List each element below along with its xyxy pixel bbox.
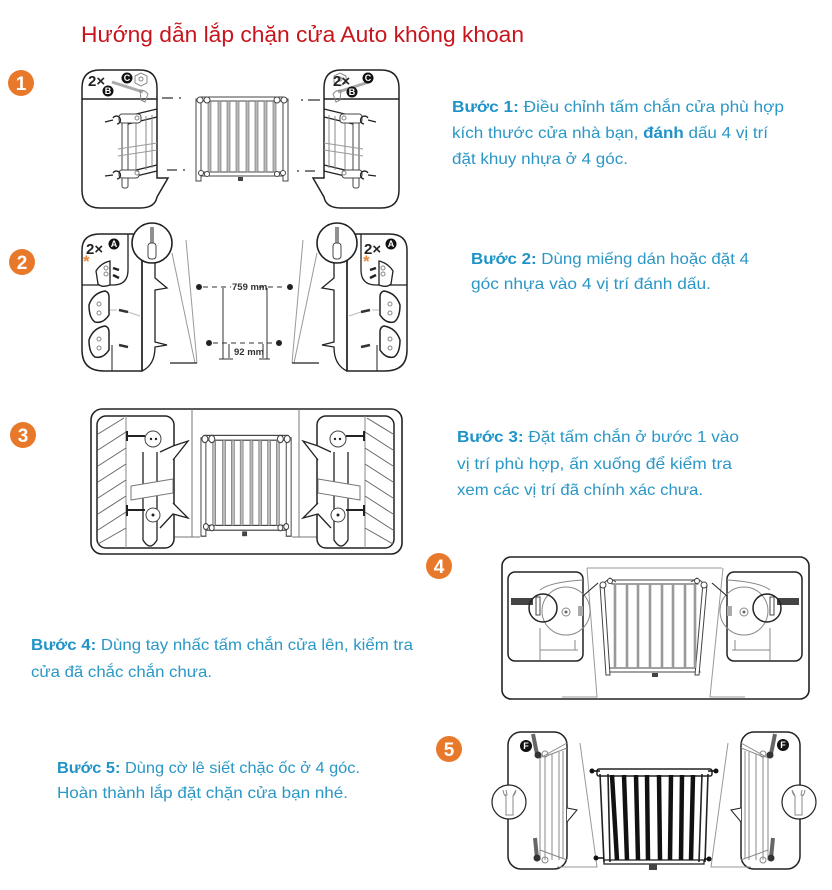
measurements [196, 282, 293, 359]
step 5 text: Bước 5: Dùng cờ lê siết chặc ốc ở 4 góc. [57, 760, 360, 777]
gate [196, 97, 288, 181]
panel: left detail: 2× [88, 73, 105, 90]
step 1 text [452, 97, 784, 168]
panel: right bracket detail: * [363, 252, 370, 271]
step 1 illustration [82, 70, 399, 208]
step 4 illustration [502, 557, 809, 699]
panel: right detail: C [365, 73, 372, 83]
step 3 illustration [91, 409, 402, 554]
step 3 badge [10, 422, 36, 448]
step 2 text [471, 251, 749, 293]
step 1 text: kích thước cửa nhà bạn, đánh dấu 4 vị trí [452, 125, 769, 142]
step 1 text: Bước 1: Điều chỉnh tấm chắn cửa phù hợp [452, 97, 784, 116]
panel: left detail: C [124, 73, 131, 83]
step 3 text: Bước 3: Đặt tấm chắn ở bước 1 vào [457, 427, 739, 446]
panel: left detail [492, 732, 597, 869]
step 5 badge: 5 [444, 740, 455, 761]
panel: left bracket detail: A [111, 239, 118, 249]
panel: right detail: B [349, 87, 356, 97]
step 2 badge: 2 [17, 253, 27, 274]
title: Hướng dẫn lắp chặn cửa Auto không khoan [81, 22, 524, 47]
panel: left detail [97, 416, 188, 548]
step 2 badge [9, 249, 35, 275]
panel: right detail [303, 416, 394, 548]
panel: right detail: F [780, 740, 786, 750]
panel: right bracket detail [292, 223, 407, 371]
step 5 text: Hoàn thành lắp đặt chặn cửa bạn nhé. [57, 783, 348, 802]
step 4 text [31, 635, 413, 681]
panel: right detail [712, 572, 802, 661]
step 4 text: cửa đã chắc chắn chưa. [31, 662, 212, 681]
panel: right detail [313, 70, 399, 208]
step 2 illustration [82, 223, 407, 371]
measurements: 759 mm [232, 282, 267, 293]
step 1 badge: 1 [16, 74, 27, 95]
panel: left detail [82, 70, 168, 208]
step 1 badge [8, 70, 34, 96]
panel: left bracket detail: * [83, 252, 90, 271]
panel: right detail [711, 732, 816, 869]
panel: left detail: B [105, 86, 112, 96]
step 4 text: Bước 4: Dùng tay nhấc tấm chắn cửa lên, kiểm tra [31, 635, 413, 654]
panel: left detail: F [523, 741, 529, 751]
panel: left bracket detail: 2× [86, 241, 103, 258]
step 4 badge [426, 553, 452, 579]
step 3 badge: 3 [18, 426, 28, 447]
step 5 text [57, 760, 360, 802]
measurements: 92 mm [234, 347, 264, 358]
step 1 text: đặt khuy nhựa ở 4 góc. [452, 151, 628, 168]
gate [201, 435, 291, 536]
panel: right bracket detail: 2× [364, 241, 381, 258]
step 2 text: góc nhựa vào 4 vị trí đánh dấu. [471, 276, 711, 293]
step 2 text: Bước 2: Dùng miếng dán hoặc đặt 4 [471, 251, 749, 268]
step 4 badge: 4 [434, 557, 445, 578]
panel: right bracket detail: A [388, 239, 395, 249]
panel: right detail: 2× [333, 73, 350, 90]
gate [600, 578, 707, 677]
step 3 text: vị trí phù hợp, ấn xuống để kiểm tra [457, 455, 732, 473]
step 3 text: xem các vị trí đã chính xác chưa. [457, 482, 703, 499]
step 3 text [457, 427, 739, 499]
panel: left detail [508, 572, 598, 661]
step 5 illustration [492, 732, 816, 870]
gate: dark [590, 768, 718, 870]
step 5 badge [436, 736, 462, 762]
panel: left bracket detail [82, 223, 197, 371]
